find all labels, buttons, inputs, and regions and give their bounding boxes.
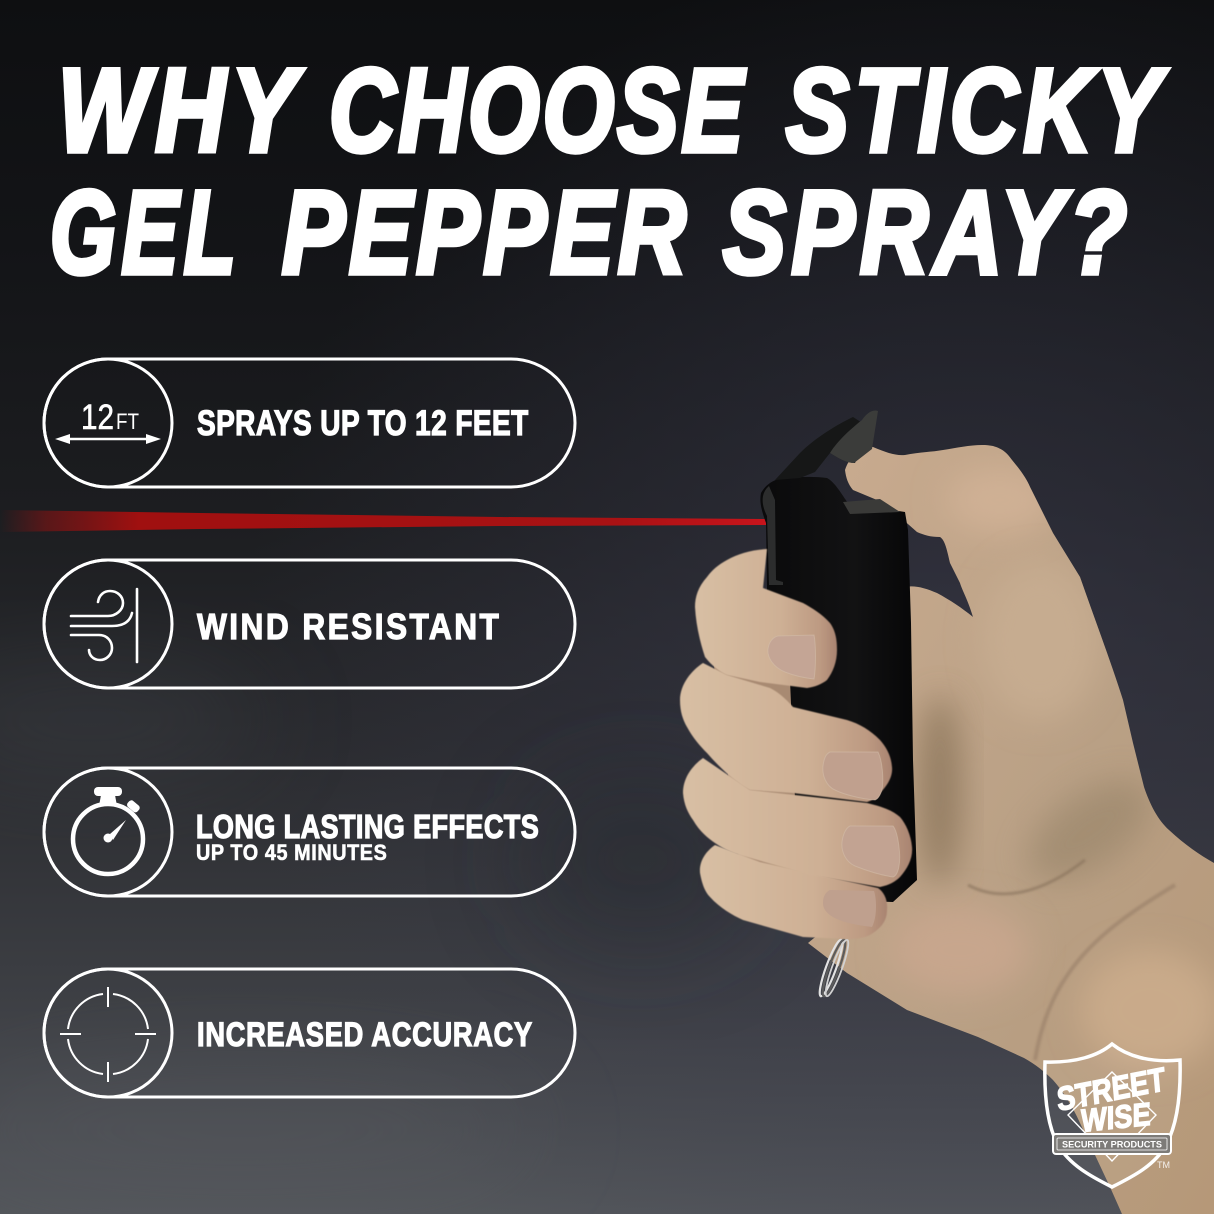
- little finger: [700, 845, 887, 939]
- finger base shadow: [712, 650, 815, 930]
- title: GEL: [50, 166, 236, 298]
- label: SPRAYS UP TO 12 FEET: [197, 403, 529, 443]
- icon: wind against wall: [71, 589, 137, 662]
- canister body: [760, 477, 917, 902]
- ring finger: [683, 758, 912, 887]
- title: PEPPER: [282, 166, 686, 298]
- label: INCREASED ACCURACY: [197, 1015, 533, 1054]
- feature pill: increased accuracy: [44, 969, 575, 1097]
- title: CHOOSE: [329, 45, 746, 177]
- label: WIND RESISTANT: [197, 607, 499, 647]
- title: WHY: [58, 44, 304, 176]
- feature pill: long lasting effects: [44, 768, 575, 896]
- logo: Streetwise Security Products shield: TM: [1157, 1160, 1170, 1170]
- middle finger: [680, 663, 892, 802]
- canister top slot: [843, 499, 900, 514]
- logo: Streetwise Security Products shield: SECURITY PRODUCTS: [1062, 1140, 1162, 1150]
- title: SPRAY?: [723, 166, 1127, 298]
- title: STICKY: [786, 44, 1168, 176]
- icon: target crosshair: [60, 987, 156, 1082]
- flip cap: [775, 411, 878, 480]
- logo: Streetwise Security Products shield: [1045, 1044, 1180, 1187]
- logo: Streetwise Security Products shield: STREET: [1055, 1061, 1167, 1119]
- feature pill: sprays up to 12 feet: [44, 359, 575, 487]
- red spray beam: [0, 510, 770, 532]
- palm and thumb: [808, 445, 1214, 1214]
- label: UP TO 45 MINUTES: [196, 841, 387, 865]
- title: [50, 44, 1168, 298]
- icon: 12 ft range: FT: [116, 409, 139, 434]
- canister side highlight: [763, 486, 783, 585]
- icon: 12 ft range: 12: [81, 398, 114, 437]
- icon: 12 ft range: [55, 398, 161, 444]
- label: LONG LASTING EFFECTS: [196, 810, 539, 846]
- photo: hand holding pepper spray: [680, 411, 1214, 1214]
- icon: stopwatch: [73, 787, 143, 874]
- keyring: [816, 938, 852, 998]
- label: [196, 810, 539, 865]
- logo: Streetwise Security Products shield: WISE: [1081, 1096, 1151, 1139]
- index finger: [695, 549, 837, 688]
- feature pill: wind resistant: [44, 560, 575, 688]
